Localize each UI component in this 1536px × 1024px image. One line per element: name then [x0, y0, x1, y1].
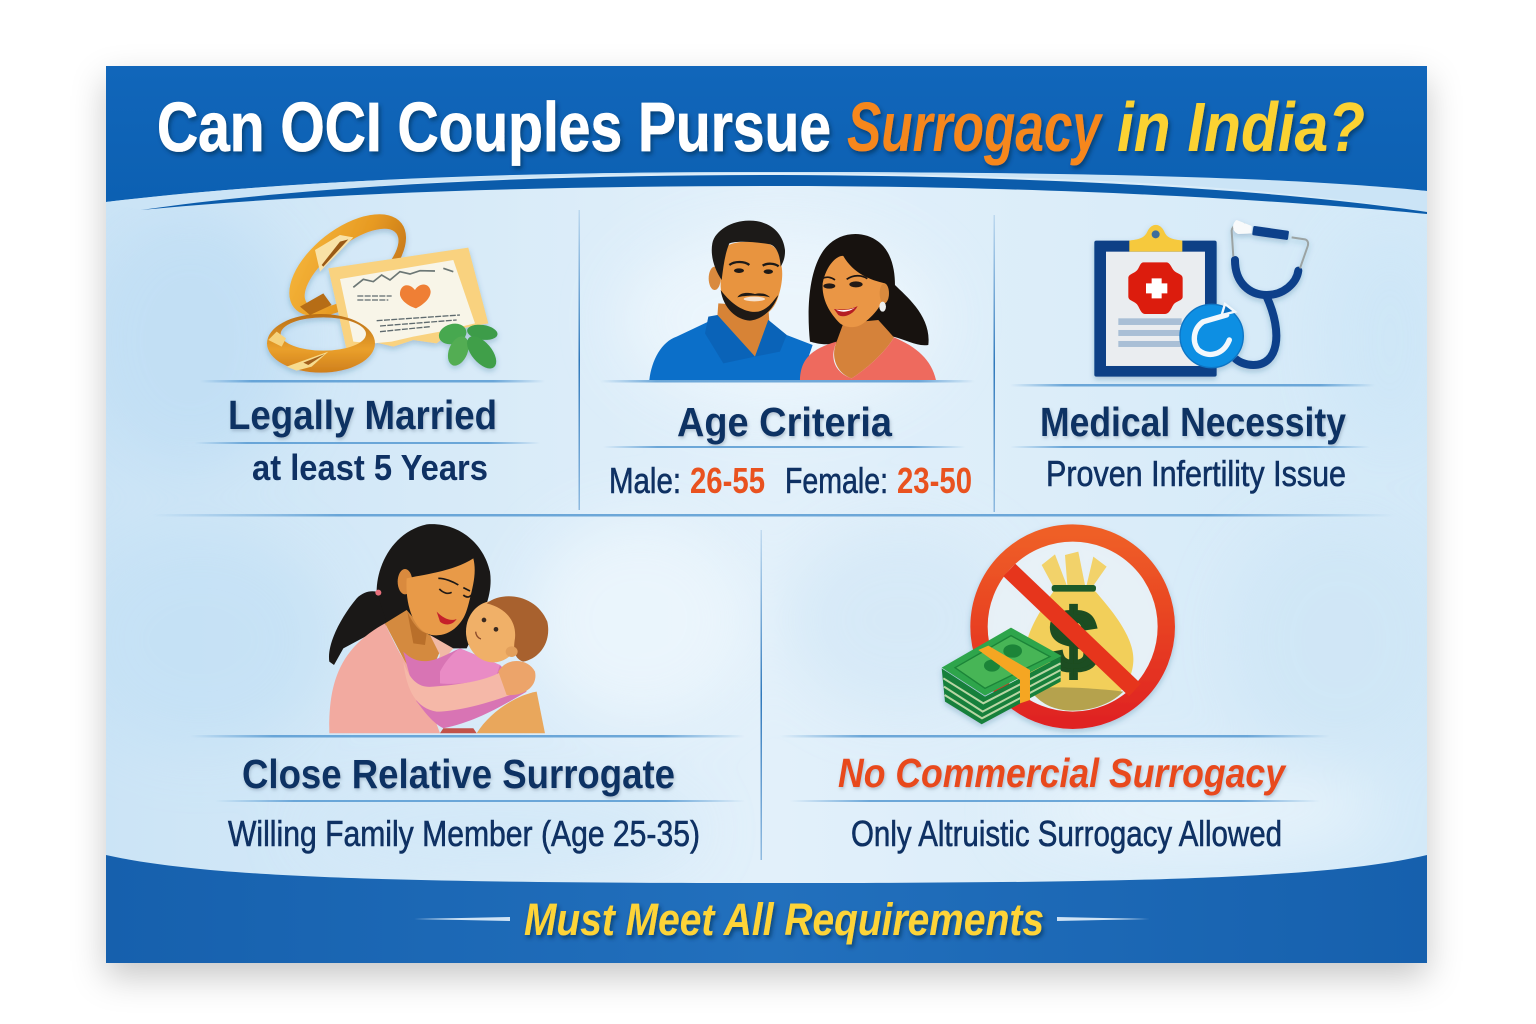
panel: close relative surrogate — [190, 524, 745, 854]
age ranges: 23-50 — [897, 460, 972, 501]
footer right dash — [1057, 917, 1150, 921]
subheading: Willing Family Member (Age 25-35) — [228, 813, 700, 854]
heading: Medical Necessity — [1040, 399, 1346, 445]
icon: clipboard and stethoscope — [1094, 220, 1308, 377]
title: Surrogacy — [847, 88, 1103, 166]
title: Can OCI Couples Pursue — [157, 88, 831, 166]
heading: Age Criteria — [677, 399, 893, 445]
age ranges: Female: — [785, 460, 888, 501]
footer text: Must Meet All Requirements — [524, 894, 1044, 945]
subheading: Only Altruistic Surrogacy Allowed — [851, 813, 1282, 854]
subheading: at least 5 Years — [252, 447, 488, 488]
panel: legally married — [195, 194, 545, 488]
age ranges: 26-55 — [690, 460, 765, 501]
header banner — [106, 66, 1427, 214]
divider under icon — [780, 735, 1330, 738]
title — [157, 88, 1365, 166]
card background — [106, 66, 1427, 963]
title: in India? — [1117, 88, 1365, 166]
panel: medical necessity — [1010, 220, 1375, 494]
grid dividers — [152, 210, 1395, 860]
heading divider — [603, 446, 965, 448]
heading: Legally Married — [228, 392, 497, 438]
heading divider — [215, 800, 745, 802]
panel: age criteria — [600, 221, 975, 501]
footer banner — [106, 855, 1427, 963]
icon: banned money: $ — [1049, 592, 1098, 691]
heading divider — [1010, 446, 1370, 448]
icon: banned money — [942, 533, 1166, 724]
heading divider — [195, 442, 540, 444]
heading: Close Relative Surrogate — [242, 751, 675, 797]
icon: wedding rings and certificate — [267, 194, 502, 374]
divider under icon — [1010, 384, 1375, 386]
age ranges: Male: — [609, 460, 681, 501]
panel: no commercial surrogacy — [780, 533, 1330, 854]
age ranges — [609, 460, 972, 501]
heading: No Commercial Surrogacy — [838, 750, 1287, 796]
heading divider — [790, 800, 1320, 802]
footer left dash — [414, 917, 510, 921]
header light swoosh — [106, 172, 1427, 212]
subheading: Proven Infertility Issue — [1046, 453, 1346, 494]
icon: couple — [649, 221, 936, 380]
icon: mother and baby — [329, 524, 548, 733]
divider under icon — [600, 380, 975, 382]
divider under icon — [200, 380, 545, 382]
header dark swoosh — [141, 175, 1427, 214]
divider under icon — [190, 735, 745, 738]
watercolor background patches — [108, 225, 1350, 846]
